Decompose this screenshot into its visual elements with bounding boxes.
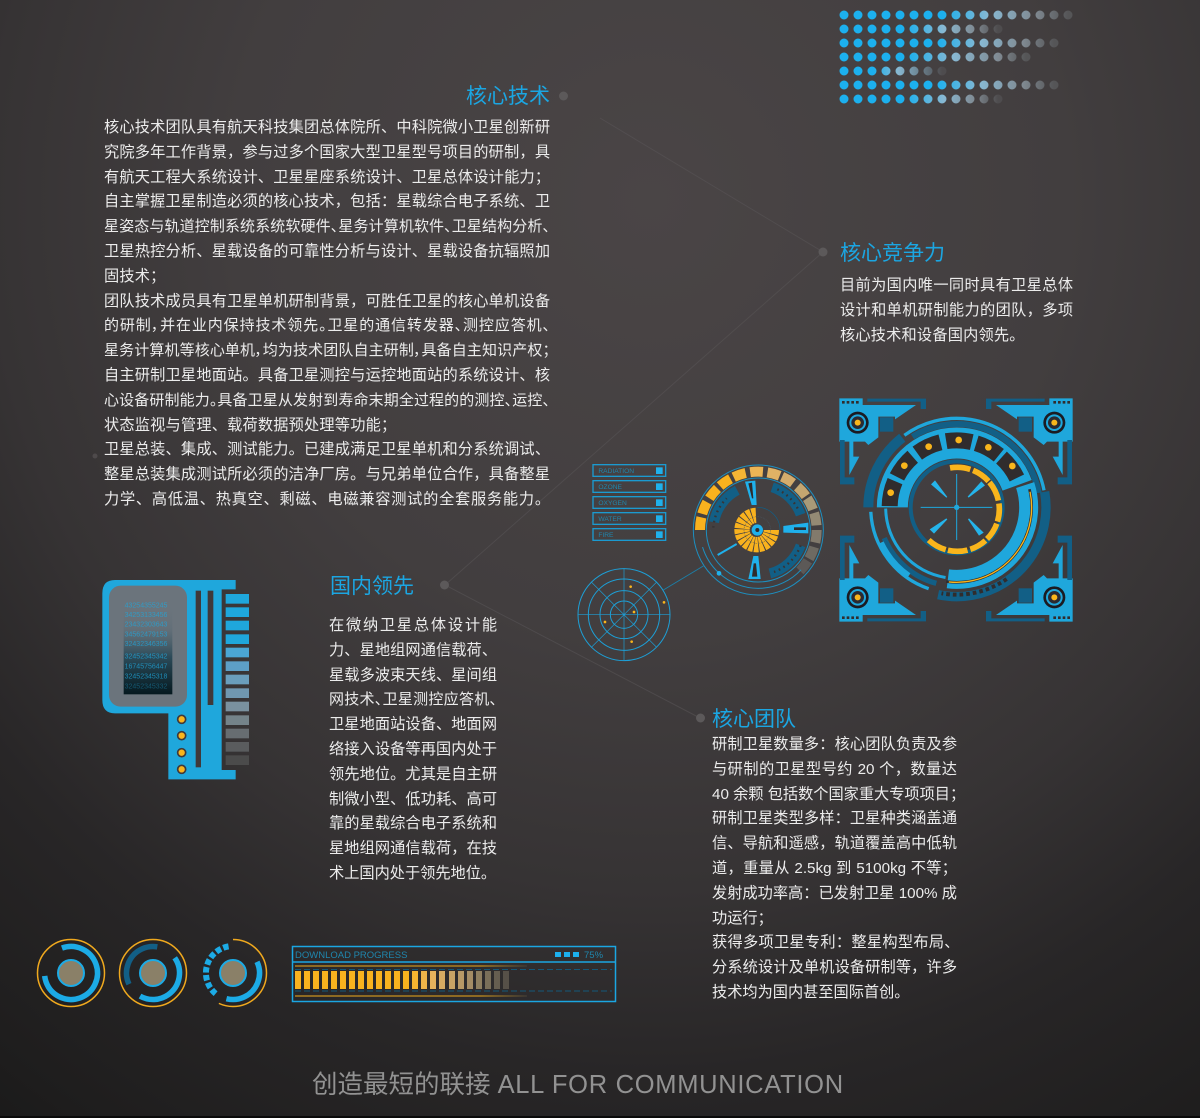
text block: domestic lead: 星地组网通信载荷，在技 bbox=[329, 840, 497, 857]
text block: core team: 分系统设计及单机设备研制等，许多 bbox=[712, 959, 957, 976]
text block: core team: 获得多项卫星专利：整星构型布局、 bbox=[712, 934, 960, 951]
heading: core competitiveness: 核心竞争力 bbox=[840, 242, 945, 265]
status menu: OXYGEN bbox=[598, 500, 627, 507]
text block: core competitiveness bbox=[840, 276, 1073, 344]
text block: core technology: 有航天工程大系统设计、卫星星座系统设计、卫星总体设计能力； bbox=[104, 169, 550, 186]
dial two bbox=[116, 936, 190, 1010]
data terminal: 43254355245 bbox=[125, 602, 168, 609]
text block: core technology: 星姿态与轨道控制系统系统软硬件、星务计算机软件、卫星结构分析、 bbox=[104, 218, 550, 235]
text block: domestic lead: 力、星地组网通信载荷、 bbox=[329, 642, 497, 659]
text block: core technology: 究院多年工作背景，参与过多个国家大型卫星型号项目的研制，具 bbox=[104, 144, 550, 161]
emblem crosshair bbox=[921, 474, 992, 540]
text block: core team: 研制卫星类型多样：卫星种类涵盖通 bbox=[712, 810, 957, 827]
bottom edge bbox=[0, 1116, 1200, 1118]
text block: domestic lead: 络接入设备等再国内处于 bbox=[329, 741, 497, 758]
text block: core technology: 卫星热控分析、星载设备的可靠性分析与设计、星载设备抗辐照加 bbox=[104, 243, 550, 260]
text block: core technology: 卫星总装、集成、测试能力。已建成满足卫星单机和分系统调试、 bbox=[104, 441, 550, 458]
dot matrix bbox=[844, 15, 1069, 99]
text block: core team: 技术均为国内甚至国际首创。 bbox=[712, 984, 909, 1001]
status menu bbox=[593, 465, 666, 540]
status menu: OZONE bbox=[598, 484, 623, 491]
data terminal: 32452345318 bbox=[125, 673, 168, 680]
text block: core team: 40 余颗 包括数个国家重大专项项目； bbox=[712, 786, 965, 803]
download progress bar: 75% bbox=[584, 950, 604, 961]
text block: core technology bbox=[104, 118, 550, 508]
text block: core team: 功运行； bbox=[712, 910, 773, 927]
text block: core technology: 自主研制卫星地面站。具备卫星测控与运控地面站的系统设计、核 bbox=[104, 367, 550, 384]
text block: core team: 发射成功率高：已发射卫星 100% 成 bbox=[712, 885, 957, 902]
radar bbox=[578, 569, 670, 661]
data terminal: 32452345332 bbox=[125, 683, 168, 690]
status menu: FIRE bbox=[598, 532, 614, 539]
connector lines bbox=[92, 118, 823, 718]
text block: core competitiveness: 核心技术和设备国内领先。 bbox=[840, 327, 1025, 344]
download progress bar bbox=[292, 946, 616, 1002]
emblem rings bbox=[832, 383, 1081, 632]
text block: core technology: 心设备研制能力。具备卫星从发射到寿命末期全过程的的测控、运控、 bbox=[104, 392, 550, 409]
data terminal: 34253133456 bbox=[125, 612, 168, 619]
data terminal: 23432303643 bbox=[125, 622, 168, 629]
text block: domestic lead bbox=[329, 616, 497, 882]
text block: core technology: 整星总装集成测试所必须的洁净厂房。与兄弟单位合作，具备整星 bbox=[104, 466, 550, 483]
emblem lamps bbox=[887, 437, 1016, 496]
text block: core technology: 核心技术团队具有航天科技集团总体院所、中科院微小卫星创新研 bbox=[104, 119, 550, 136]
heading: domestic lead: 国内领先 bbox=[330, 575, 414, 598]
status menu: WATER bbox=[598, 516, 622, 523]
download progress bar: DOWNLOAD PROGRESS bbox=[295, 950, 407, 961]
dial three bbox=[198, 938, 268, 1008]
text block: core team: 信、导航和遥感，轨道覆盖高中低轨 bbox=[712, 835, 957, 852]
text block: domestic lead: 在微纳卫星总体设计能 bbox=[329, 617, 497, 634]
text block: core technology: 的研制，并在业内保持技术领先。卫星的通信转发器、测控应答机、 bbox=[104, 317, 550, 334]
text block: core technology: 固技术； bbox=[104, 268, 166, 285]
text block: core technology: 力学、高低温、热真空、剩磁、电磁兼容测试的全套服务能力。 bbox=[104, 491, 550, 508]
text block: core team: 道，重量从 2.5kg 到 5100kg 不等； bbox=[712, 860, 957, 877]
text block: core team bbox=[712, 736, 965, 1001]
data terminal bbox=[102, 580, 249, 779]
text block: domestic lead: 制微小型、低功耗、高可 bbox=[329, 791, 497, 808]
text block: core competitiveness: 目前为国内唯一同时具有卫星总体 bbox=[840, 277, 1073, 294]
text block: core technology: 状态监视与管理、载荷数据预处理等功能； bbox=[104, 417, 396, 434]
text block: core technology: 星务计算机等核心单机，均为技术团队自主研制，具备自主知识产权； bbox=[104, 342, 550, 359]
data terminal: 34562479153 bbox=[125, 631, 168, 638]
footer slogan: 创造最短的联接 ALL FOR COMMUNICATION bbox=[312, 1071, 844, 1099]
text block: domestic lead: 靠的星载综合电子系统和 bbox=[329, 815, 497, 832]
heading: core technology: 核心技术 bbox=[466, 85, 550, 108]
data terminal: 32432346356 bbox=[125, 641, 168, 648]
heading: core team: 核心团队 bbox=[712, 708, 796, 731]
text block: domestic lead: 卫星地面站设备、地面网 bbox=[329, 716, 497, 733]
data terminal: 16745756447 bbox=[125, 663, 168, 670]
text block: domestic lead: 网技术、卫星测控应答机、 bbox=[329, 691, 497, 708]
text block: core technology: 团队技术成员具有卫星单机研制背景，可胜任卫星的核心单机设备 bbox=[104, 293, 550, 310]
data terminal: 32452345342 bbox=[125, 653, 168, 660]
text block: domestic lead: 领先地位。尤其是自主研 bbox=[329, 766, 497, 783]
circular gauge bbox=[663, 448, 841, 612]
main emblem bbox=[832, 383, 1081, 632]
status menu: RADIATION bbox=[598, 468, 634, 475]
text block: core technology: 自主掌握卫星制造必须的核心技术，包括：星载综合电子系统、卫 bbox=[104, 193, 550, 210]
dial one bbox=[37, 939, 105, 1007]
text block: core team: 研制卫星数量多：核心团队负责及参 bbox=[712, 736, 957, 753]
text block: core team: 与研制的卫星型号约 20 个，数量达 bbox=[712, 761, 957, 778]
text block: domestic lead: 术上国内处于领先地位。 bbox=[329, 865, 496, 882]
node markers bbox=[440, 92, 828, 722]
text block: domestic lead: 星载多波束天线、星间组 bbox=[329, 667, 497, 684]
text block: core competitiveness: 设计和单机研制能力的团队，多项 bbox=[840, 302, 1073, 319]
emblem corners bbox=[839, 398, 1073, 622]
